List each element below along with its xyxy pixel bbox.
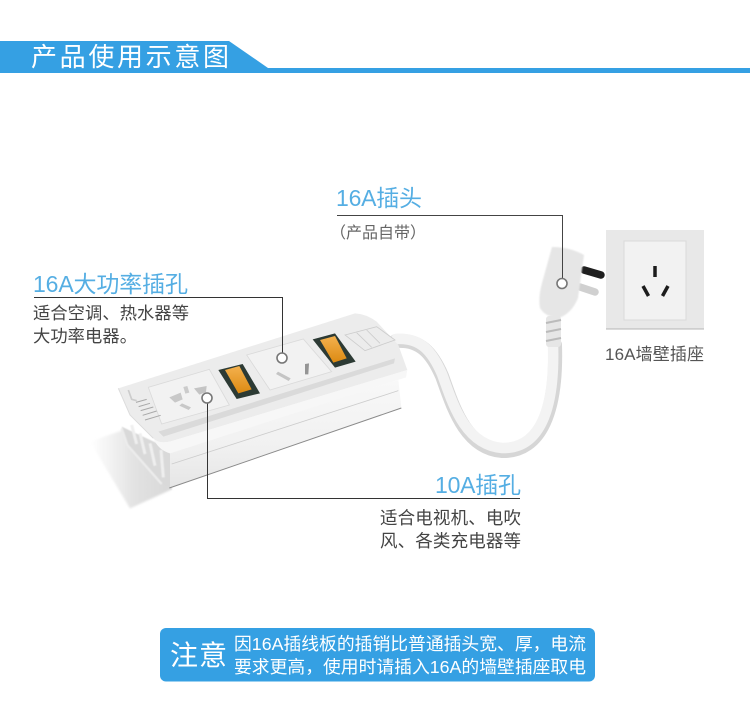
wall socket label: 16A墙壁插座	[605, 345, 704, 364]
header banner	[0, 41, 750, 73]
header title: 产品使用示意图	[31, 42, 229, 72]
strain relief	[546, 316, 561, 347]
strip vents	[128, 390, 161, 420]
notice heading: 注意	[170, 640, 227, 671]
rocker switch 2	[313, 333, 356, 368]
power cable	[396, 339, 555, 451]
strip end fins	[122, 425, 172, 490]
callout: 10A socket: 风、各类充电器等	[380, 531, 521, 551]
indicator panel	[345, 327, 395, 351]
callout: 16A plug: 16A插头	[336, 185, 422, 211]
strip top face	[118, 313, 407, 453]
callout: 16A high-power socket: 适合空调、热水器等	[33, 303, 189, 323]
plug body	[539, 247, 584, 318]
callout: 16A high-power socket: 大功率电器。	[33, 326, 137, 346]
strip front body	[169, 380, 401, 488]
wall socket	[606, 230, 704, 329]
notice text	[234, 634, 586, 677]
plug	[539, 247, 601, 347]
callout: 10A socket: 10A插孔	[435, 472, 521, 498]
black pin	[584, 270, 601, 275]
callout: 16A high-power socket: 16A大功率插孔	[33, 271, 188, 297]
callout: 16A plug: （产品自带）	[330, 224, 426, 242]
power strip	[90, 313, 407, 508]
16A socket plate	[148, 369, 229, 424]
rocker switch 1	[218, 364, 260, 399]
grey pin	[580, 287, 595, 292]
notice box	[160, 628, 595, 682]
callout: 16A high-power socket	[33, 271, 287, 363]
callout: 16A plug	[330, 185, 567, 288]
notice text: 因16A插线板的插销比普通插头宽、厚，电流	[234, 634, 586, 654]
notice text: 要求更高，使用时请插入16A的墙壁插座取电	[234, 657, 586, 677]
callout: 10A socket: 适合电视机、电吹	[380, 508, 521, 528]
strip shadow	[90, 430, 172, 508]
callout: 10A socket	[202, 393, 521, 551]
socket holes	[643, 266, 668, 296]
10A socket plate	[247, 339, 332, 390]
